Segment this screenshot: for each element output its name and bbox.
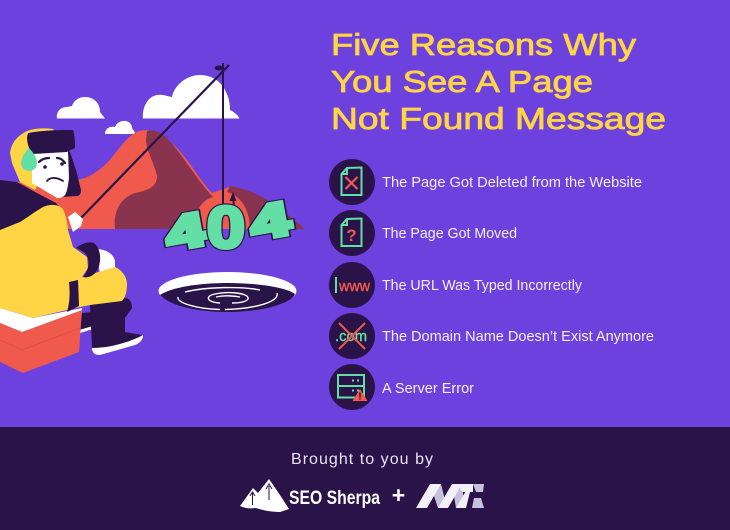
right ear flap bbox=[60, 150, 81, 197]
icon: sweat drop bbox=[21, 148, 37, 171]
fishing rod and line bbox=[80, 63, 236, 219]
icon: clouds bbox=[57, 75, 240, 134]
illustration: ice fishing scene bbox=[0, 63, 305, 373]
reason 2: page moved: ? bbox=[346, 226, 357, 245]
reason 5: server error bbox=[329, 364, 474, 410]
logo: SEO Sherpa: SEO Sherpa bbox=[289, 487, 380, 509]
white knee bbox=[96, 249, 115, 274]
title bbox=[331, 27, 666, 136]
box seat bbox=[0, 310, 82, 373]
reason 4: domain gone: The Domain Name Doesn’t Exist Anymore bbox=[382, 329, 654, 345]
collar bbox=[0, 180, 64, 232]
logo: SEO Sherpa bbox=[240, 479, 380, 512]
404 sign: 4 bbox=[162, 202, 209, 261]
front boot bbox=[90, 298, 142, 352]
reason 1: page deleted: The Page Got Deleted from the Website bbox=[382, 175, 642, 191]
face expression bbox=[39, 158, 65, 181]
404 sign: 4 bbox=[246, 192, 294, 250]
ice hole bbox=[158, 272, 296, 312]
sleeve cuff bbox=[76, 242, 100, 277]
reason 3: URL mistyped: www bbox=[338, 278, 370, 295]
reason 5: server error: A Server Error bbox=[382, 381, 474, 397]
404 sign: 0 bbox=[207, 195, 245, 261]
knee patch bbox=[67, 280, 79, 312]
logo: MT bbox=[416, 484, 484, 508]
reason 3: URL mistyped bbox=[329, 262, 583, 308]
404 sign: 4 bbox=[246, 192, 294, 250]
reason 2: page moved bbox=[329, 210, 517, 256]
mountains bbox=[8, 130, 305, 229]
404 sign bbox=[162, 192, 294, 261]
white hand bbox=[68, 212, 83, 232]
face bbox=[32, 151, 69, 198]
title: Not Found Message bbox=[331, 101, 666, 136]
reason 1: page deleted bbox=[329, 159, 642, 205]
yellow coat bbox=[0, 205, 127, 318]
footer text: Brought to you by bbox=[291, 451, 433, 468]
back boot bbox=[80, 312, 93, 331]
title: Five Reasons Why bbox=[331, 27, 637, 62]
seat cushion bbox=[0, 308, 82, 332]
404 sign: 0 bbox=[207, 195, 245, 261]
hood bbox=[10, 128, 60, 190]
character: fisherman bbox=[0, 128, 143, 373]
reason 2: page moved: The Page Got Moved bbox=[382, 226, 517, 242]
title: You See A Page bbox=[331, 64, 593, 99]
plus sign: + bbox=[392, 482, 405, 508]
reason 4: domain gone: .com bbox=[335, 328, 367, 345]
404 sign: 4 bbox=[162, 202, 209, 261]
list: reasons bbox=[329, 159, 654, 410]
footer band bbox=[0, 427, 730, 530]
reason 3: URL mistyped: The URL Was Typed Incorrectly bbox=[382, 278, 583, 294]
hat bbox=[27, 130, 75, 154]
reason 4: domain gone bbox=[329, 313, 654, 359]
